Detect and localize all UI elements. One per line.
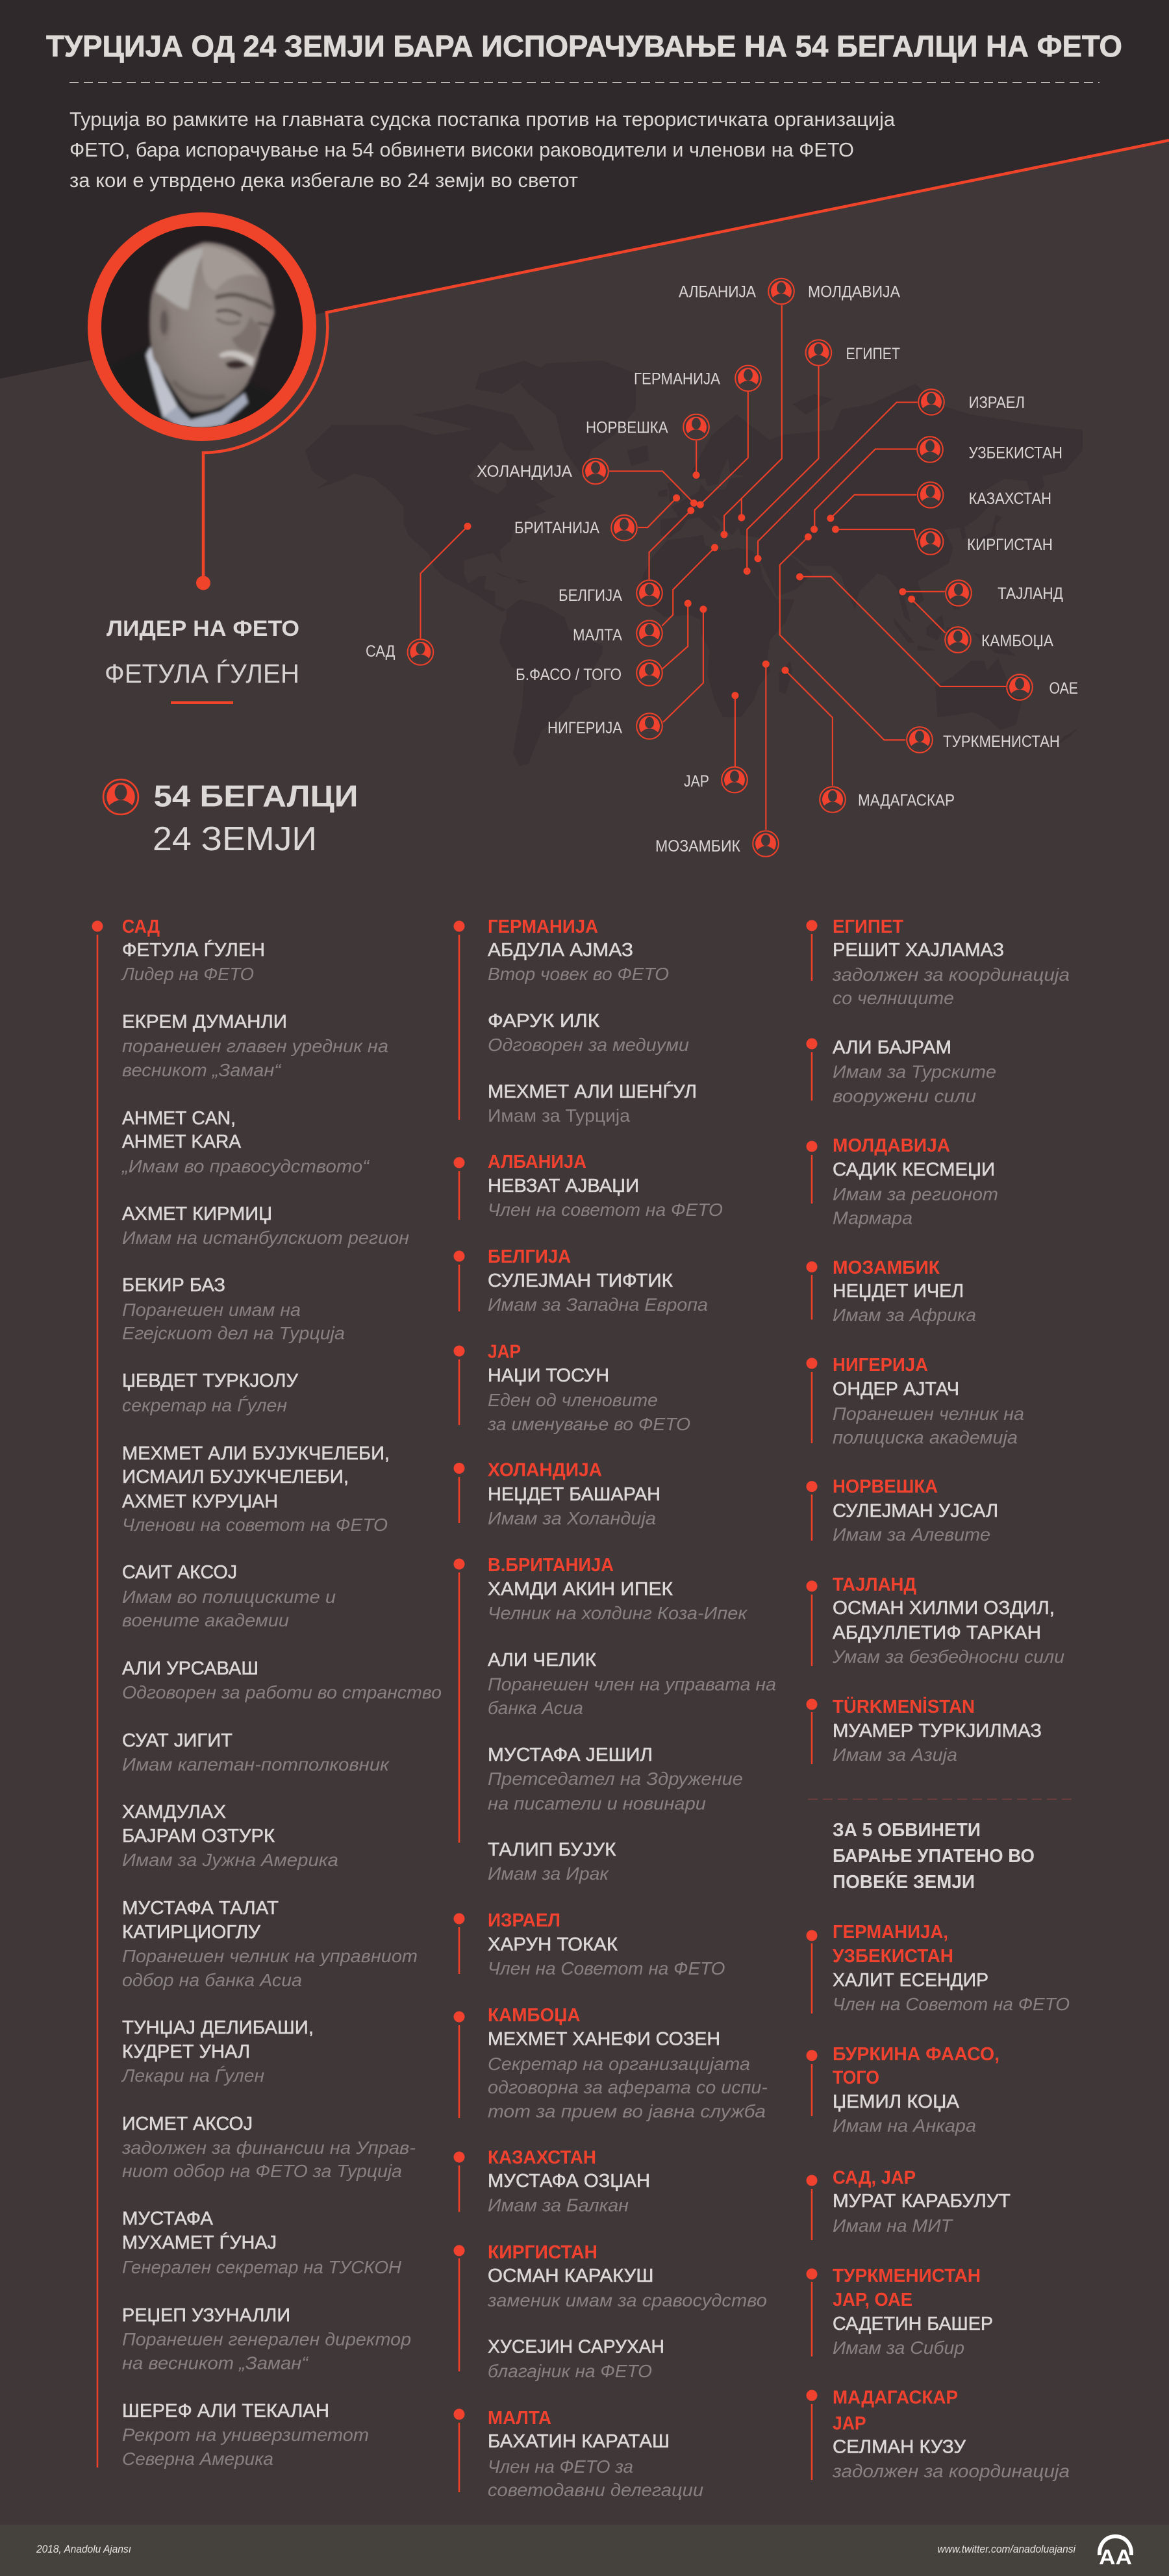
entry: Албанија [453, 1152, 723, 1220]
entry: В.Британија [453, 1555, 776, 1884]
column 3 [807, 916, 1075, 2481]
entry: Германија: ГЕРМАНИЈА [488, 916, 598, 937]
entry: САД: ИСМЕТ АКСОЈ [122, 2114, 253, 2134]
entry: Али Бајрам [807, 1037, 996, 1106]
entry: Молдавија: Имам за регионот [833, 1184, 998, 1204]
entry: САД: БЕКИР БАЗ [122, 1275, 225, 1296]
map country labels: КАМБОЏА [981, 632, 1053, 650]
entry: САД: ХАМДУЛАХ [122, 1802, 226, 1823]
entry: Буркина Фаасо, Того: ЏЕМИЛ КОЏА [833, 2091, 960, 2112]
entry: Камбоџа: тот за прием во јавна служба [488, 2101, 766, 2121]
entry: Холандија: Имам за Холандија [488, 1508, 656, 1528]
entry: В.Британија: Челник на холдинг Коза-Ипек [488, 1603, 748, 1623]
entry: САД: Имам на истанбулскиот регион [122, 1228, 409, 1248]
leader caption: ЛИДЕР НА ФЕТО [107, 616, 299, 641]
entry: САД: САИТ АКСОЈ [122, 1562, 237, 1583]
entry: Мадагаскар, Јар: ЈАР [833, 2414, 866, 2434]
entry: Египет [807, 916, 1070, 1008]
entry: САД: ФЕТУЛА ЃУЛЕН [122, 939, 265, 961]
entry: Али Бајрам: АЛИ БАЈРАМ [833, 1037, 951, 1058]
entry: САД, Јар: САД, ЈАР [833, 2167, 916, 2188]
column 1 [92, 916, 442, 2469]
entry: САД: ЕКРЕМ ДУМАНЛИ [122, 1012, 287, 1033]
map country labels: БРИТАНИЈА [514, 519, 599, 537]
entry: Албанија: АЛБАНИЈА [488, 1152, 586, 1172]
map country labels: ИЗРАЕЛ [969, 394, 1025, 412]
entry: Египет: со челниците [833, 988, 954, 1008]
entry: САД: ниот одбор на ФЕТО за Турција [122, 2161, 402, 2181]
map country labels: КАЗАХСТАН [969, 490, 1051, 508]
entry: Јар: за именување во ФЕТО [487, 1414, 690, 1434]
entry: САД: ТУНЏАЈ ДЕЛИБАШИ, [122, 2017, 314, 2038]
entry: Мозамбик [807, 1257, 976, 1325]
portrait photo [95, 220, 309, 434]
entry: САД: АХМЕТ КИРМИЏ [122, 1204, 272, 1224]
entry: САД: МУСТАФА [122, 2208, 214, 2229]
entry: САД: на весникот „Заман“ [122, 2353, 309, 2373]
entry: САД, Јар: Имам на МИТ [833, 2216, 953, 2236]
entry: Норвешка: Имам за Алевите [833, 1524, 990, 1545]
entry: Туркменистан, Јар, ОАЕ [807, 2266, 993, 2358]
entry: Германија, Узбекистан: УЗБЕКИСТАН [833, 1946, 953, 1967]
footer credit: 2018, Anadolu Ajansı [36, 2543, 131, 2555]
entry: САД: воените академии [122, 1610, 289, 1630]
entry: В.Британија: Претседател на Здружение [488, 1769, 743, 1789]
map icons: people [408, 279, 1033, 857]
entry: Малта: Член на ФЕТО за [488, 2456, 633, 2477]
entry: Молдавија: САДИК КЕСМЕЏИ [833, 1159, 995, 1180]
entry: Германија [453, 916, 697, 1126]
entry: САД: „Имам во правосудството“ [121, 1156, 370, 1176]
entry: Малта: БАХАТИН КАРАТАШ [488, 2431, 670, 2452]
map country labels: МОЗАМБИК [655, 837, 740, 855]
entry: Тајланд: ТАЈЛАНД [833, 1574, 916, 1595]
entry: Албанија: НЕВЗАТ АЈВАЏИ [488, 1176, 639, 1196]
entry: В.Британија: Поранешен член на управата на [488, 1674, 776, 1694]
entry: САД: Имам капетан-потполковник [122, 1754, 390, 1774]
entry: САД: весникот „Заман“ [122, 1060, 282, 1080]
intro paragraph: Турција во рамките на главната судска постапка против на терористичката организација [69, 108, 896, 131]
map country labels: НИГЕРИЈА [547, 719, 622, 737]
entry: Јар: Еден од членовите [488, 1390, 658, 1410]
entry: Белгија: БЕЛГИЈА [488, 1246, 571, 1267]
entry: Türkmenistan: МУАМЕР ТУРКЈИЛМАЗ [833, 1721, 1042, 1741]
entry: Тајланд: АБДУЛЛЕТИФ ТАРКАН [833, 1623, 1041, 1643]
entry: Буркина Фаасо, Того: ТОГО [833, 2067, 879, 2088]
map country labels: САД [366, 642, 396, 661]
entry: Малта [453, 2408, 703, 2500]
entry: Тајланд [807, 1574, 1064, 1667]
map country labels: ЈАР [684, 772, 709, 790]
summary counter: 24 ЗЕМЈИ [153, 820, 317, 858]
entry: Јар [453, 1342, 690, 1434]
entry: САД: Одговорен за работи во странство [122, 1682, 442, 1702]
entry: Малта: МАЛТА [488, 2408, 551, 2429]
map country labels: МАДАГАСКАР [858, 792, 955, 810]
intro paragraph: за кои е утврдено дека избегале во 24 земји во светот [69, 169, 578, 192]
entry: Нигерија: НИГЕРИЈА [833, 1355, 928, 1376]
entry: САД: Имам во полициските и [122, 1587, 336, 1607]
entry: В.Британија: Имам за Ирак [488, 1863, 610, 1884]
map country labels: ТАЈЛАНД [998, 585, 1063, 603]
entry: САД: Членови на советот на ФЕТО [122, 1515, 388, 1535]
map country labels: МОЛДАВИЈА [808, 283, 900, 301]
map endpoint dots [464, 472, 915, 699]
entry: Германија, Узбекистан: Член на Советот на ФЕТО [833, 1994, 1070, 2014]
entry: Мозамбик: НЕЏДЕТ ИЧЕЛ [833, 1281, 964, 1302]
map country labels: УЗБЕКИСТАН [969, 444, 1062, 462]
entry: Киргистан: КИРГИСТАН [488, 2242, 597, 2263]
entry: Белгија [453, 1246, 708, 1315]
entry: Германија: Одговорен за медиуми [488, 1035, 689, 1055]
entry: Türkmenistan [807, 1696, 1042, 1765]
entry: САД: АЛИ УРСАВАШ [122, 1658, 258, 1679]
entry: Туркменистан, Јар, ОАЕ: ТУРКМЕНИСТАН [833, 2266, 981, 2286]
entry: Киргистан: ОСМАН КАРАКУШ [488, 2266, 653, 2286]
subheading: 5 accused: БАРАЊЕ УПАТЕНО ВО [833, 1846, 1035, 1867]
entry: САД: МУСТАФА ТАЛАТ [122, 1898, 279, 1919]
entry: Туркменистан, Јар, ОАЕ: Имам за Сибир [833, 2338, 964, 2358]
icon: AA logo [1099, 2536, 1132, 2569]
dark header background [0, 0, 1169, 379]
footer bar [0, 2525, 1169, 2576]
column 2 [453, 916, 776, 2500]
entry: Белгија: СУЛЕЈМАН ТИФТИК [488, 1270, 673, 1291]
entry: САД: Рекрот на универзитетот [122, 2425, 369, 2445]
entry: Камбоџа: одговорна за аферата со испи- [488, 2077, 768, 2097]
entry: САД: СУАТ ЈИГИТ [122, 1730, 233, 1751]
subheading: 5 accused: ПОВЕЌЕ ЗЕМЈИ [833, 1871, 975, 1893]
map country labels: МАЛТА [573, 626, 622, 644]
entry: Камбоџа: КАМБОЏА [488, 2005, 581, 2026]
entry: Камбоџа: Секретар на организацијата [488, 2054, 750, 2074]
entry: Норвешка: НОРВЕШКА [833, 1476, 938, 1497]
entry: Тајланд: Умам за безбедносни сили [832, 1647, 1064, 1667]
map country labels: НОРВЕШКА [586, 419, 668, 437]
entry: Али Бајрам: Имам за Турските [833, 1061, 996, 1082]
entry: Нигерија [807, 1355, 1024, 1447]
entry: Холандија [453, 1460, 660, 1528]
leader caption [105, 616, 299, 704]
entry: Буркина Фаасо, Того [807, 2044, 999, 2136]
entry: Казахстан: МУСТАФА ОЗЏАН [488, 2171, 650, 2191]
entry: В.Британија: В.БРИТАНИЈА [488, 1555, 614, 1576]
entry: Тајланд: ОСМАН ХИЛМИ ОЗДИЛ, [833, 1598, 1055, 1619]
entry: Буркина Фаасо, Того: БУРКИНА ФААСО, [833, 2044, 999, 2065]
entry: САД: ИСМАИЛ БУЈУКЧЕЛЕБИ, [122, 1467, 349, 1487]
entry: САД: САД [122, 916, 160, 937]
summary counter [103, 779, 358, 858]
entry: САД, Јар [807, 2167, 1011, 2240]
entry: Германија: МЕХМЕТ АЛИ ШЕНЃУЛ [488, 1081, 697, 1102]
entry: Мозамбик: МОЗАМБИК [833, 1257, 940, 1278]
entry: Киргистан: благајник на ФЕТО [488, 2361, 652, 2381]
entry: Молдавија [807, 1135, 998, 1228]
entry: Холандија: ХОЛАНДИЈА [488, 1460, 602, 1481]
entry: Норвешка: СУЛЕЈМАН УЈСАЛ [833, 1501, 998, 1522]
entry: САД: АХМЕТ КУРУЏАН [122, 1491, 278, 1512]
map country labels: Б.ФАСО / ТОГО [516, 666, 622, 684]
entry: Јар: ЈАР [488, 1342, 521, 1363]
entry: Германија, Узбекистан: ГЕРМАНИЈА, [833, 1922, 948, 1943]
entry: САД: РЕЏЕП УЗУНАЛЛИ [122, 2305, 290, 2326]
entry: Египет: задолжен за координација [832, 965, 1070, 985]
leader caption: ФЕТУЛА ЃУЛЕН [105, 659, 299, 688]
intro paragraph [69, 108, 896, 192]
entry: Türkmenistan: TÜRKMENİSTAN [833, 1696, 975, 1717]
entry: В.Британија: МУСТАФА ЈЕШИЛ [488, 1745, 653, 1765]
entry: В.Британија: ТАЛИП БУЈУК [488, 1839, 616, 1860]
entry: Мозамбик: Имам за Африка [833, 1305, 976, 1325]
entry: В.Британија: на писатели и новинари [488, 1793, 706, 1813]
map country labels: ЕГИПЕТ [846, 345, 900, 363]
entry: САД, Јар: МУРАТ КАРАБУЛУТ [833, 2191, 1011, 2212]
entry: САД: МУХАМЕТ ЃУНАЈ [122, 2232, 277, 2253]
icon: AA logo: AA [1099, 2545, 1132, 2569]
entry: САД: Поранешен челник на управниот [122, 1946, 418, 1966]
entry: Казахстан: Имам за Балкан [488, 2195, 629, 2215]
entry: Буркина Фаасо, Того: Имам на Анкара [833, 2115, 976, 2136]
entry: Малта: советодавни делегации [488, 2480, 703, 2500]
entry: САД: Северна Америка [122, 2449, 273, 2469]
map connector lines [420, 305, 1006, 829]
entry: Мадагаскар, Јар: задолжен за координација [832, 2461, 1070, 2481]
entry: Белгија: Имам за Западна Европа [488, 1294, 708, 1315]
entry: Казахстан: КАЗАХСТАН [488, 2147, 596, 2168]
entry: САД: КАТИРЦИОГЛУ [122, 1922, 261, 1943]
entry: САД: ЏЕВДЕТ ТУРКЈОЛУ [122, 1370, 299, 1391]
entry: САД: МЕХМЕТ АЛИ БУЈУКЧЕЛЕБИ, [122, 1443, 390, 1464]
entry: Нигерија: Поранешен челник на [833, 1404, 1024, 1424]
entry: Али Бајрам: вооружени сили [833, 1086, 976, 1106]
entry: САД: Поранешен имам на [122, 1300, 301, 1320]
entry: Израел: ХАРУН ТОКАК [488, 1934, 618, 1955]
entry: Нигерија: полициска академија [833, 1428, 1018, 1447]
map country labels: ОАЕ [1050, 679, 1078, 698]
entry: Мадагаскар, Јар: МАДАГАСКАР [833, 2388, 958, 2408]
entry: Германија: Втор човек во ФЕТО [488, 964, 669, 984]
entry: Јар: НАЏИ ТОСУН [488, 1365, 609, 1386]
red leader connector line [196, 140, 1169, 590]
entry: Казахстан [453, 2147, 650, 2215]
entry: САД: ШЕРЕФ АЛИ ТЕКАЛАН [122, 2401, 329, 2421]
entry: Германија: Имам за Турција [488, 1105, 630, 1126]
entry: Германија, Узбекистан: ХАЛИТ ЕСЕНДИР [833, 1970, 988, 1991]
summary counter: 54 БЕГАЛЦИ [153, 779, 358, 813]
entry: Египет: РЕШИТ ХАЈЛАМАЗ [833, 940, 1004, 961]
entry: Молдавија: Мармара [833, 1208, 912, 1228]
entry: Албанија: Член на советот на ФЕТО [488, 1200, 723, 1220]
entry: САД: Лидер на ФЕТО [121, 964, 254, 984]
entry: Германија: ФАРУК ИЛК [488, 1011, 599, 1031]
entry: Холандија: НЕЏДЕТ БАШАРАН [488, 1484, 660, 1505]
subheading: 5 accused: ЗА 5 ОБВИНЕТИ [833, 1820, 981, 1841]
entry: САД: Лекари на Ѓулен [121, 2065, 264, 2086]
entry: В.Британија: ХАМДИ АКИН ИПЕК [488, 1579, 673, 1600]
world map [305, 360, 1083, 766]
entry: Германија, Узбекистан [807, 1922, 1070, 2014]
entry: Норвешка [807, 1476, 998, 1545]
map country labels: ХОЛАНДИЈА [477, 462, 572, 481]
map country labels: БЕЛГИЈА [559, 587, 622, 605]
entry: САД: Егејскиот дел на Турција [122, 1323, 345, 1343]
entry: Молдавија: МОЛДАВИЈА [833, 1135, 950, 1156]
entry: Камбоџа [453, 2005, 768, 2121]
map country labels: КИРГИСТАН [967, 536, 1053, 554]
subheading: 5 accused [833, 1820, 1035, 1893]
entry: В.Британија: АЛИ ЧЕЛИК [488, 1650, 596, 1671]
entry: САД [92, 916, 442, 2469]
entry: Мадагаскар, Јар: СЕЛМАН КУЗУ [833, 2437, 966, 2458]
entry: Мадагаскар, Јар [807, 2388, 1070, 2481]
map country labels [366, 283, 1078, 855]
entry: Türkmenistan: Имам за Азија [833, 1745, 957, 1765]
map country labels: АЛБАНИЈА [679, 283, 756, 301]
footer twitter link: www.twitter.com/anadoluajansi [938, 2543, 1076, 2555]
entry: В.Британија: банка Асиа [488, 1698, 583, 1718]
entry: Туркменистан, Јар, ОАЕ: САДЕТИН БАШЕР [833, 2314, 993, 2334]
entry: Египет: ЕГИПЕТ [833, 916, 903, 937]
entry: Киргистан [453, 2242, 767, 2381]
entry: САД: поранешен главен уредник на [122, 1036, 388, 1056]
entry: САД: Поранешен генерален директор [122, 2329, 411, 2349]
entry: Туркменистан, Јар, ОАЕ: ЈАР, ОАЕ [833, 2290, 912, 2310]
entry: Камбоџа: МЕХМЕТ ХАНЕФИ СОЗЕН [488, 2029, 720, 2050]
entry: САД: БАЈРАМ ОЗТУРК [122, 1826, 275, 1847]
entry: Израел [453, 1910, 725, 1978]
entry: Киргистан: ХУСЕЈИН САРУХАН [488, 2337, 664, 2358]
entry: САД: КУДРЕТ УНАЛ [122, 2041, 250, 2062]
entry: Израел: ИЗРАЕЛ [488, 1910, 560, 1931]
entry: Нигерија: ОНДЕР АЈТАЧ [833, 1379, 959, 1400]
entry: САД: АНМЕТ CAN, [122, 1108, 236, 1129]
entry: САД: Генерален секретар на ТУСКОН [122, 2257, 402, 2277]
map country labels: ГЕРМАНИЈА [634, 370, 720, 388]
map country labels: ТУРКМЕНИСТАН [943, 733, 1060, 751]
intro paragraph: ФЕТО, бара испорачување на 54 обвинети високи раководители и членови на ФЕТО [69, 138, 854, 161]
entry: САД: задолжен за финансии на Управ- [121, 2138, 416, 2158]
entry: Киргистан: заменик имам за сравосудство [487, 2290, 767, 2310]
entry: САД: АНМЕТ KARA [122, 1131, 242, 1152]
entry: САД: Имам за Јужна Америка [122, 1850, 338, 1870]
entry: Германија: АБДУЛА АЈМАЗ [488, 940, 633, 961]
entry: САД: секретар на Ѓулен [122, 1395, 287, 1415]
entry: САД: одбор на банка Асиа [122, 1970, 302, 1990]
entry: Израел: Член на Советот на ФЕТО [488, 1958, 725, 1978]
title: ТУРЦИЈА ОД 24 ЗЕМЈИ БАРА ИСПОРАЧУВАЊЕ НА 54 БЕГАЛЦИ НА ФЕТО [46, 29, 1122, 63]
